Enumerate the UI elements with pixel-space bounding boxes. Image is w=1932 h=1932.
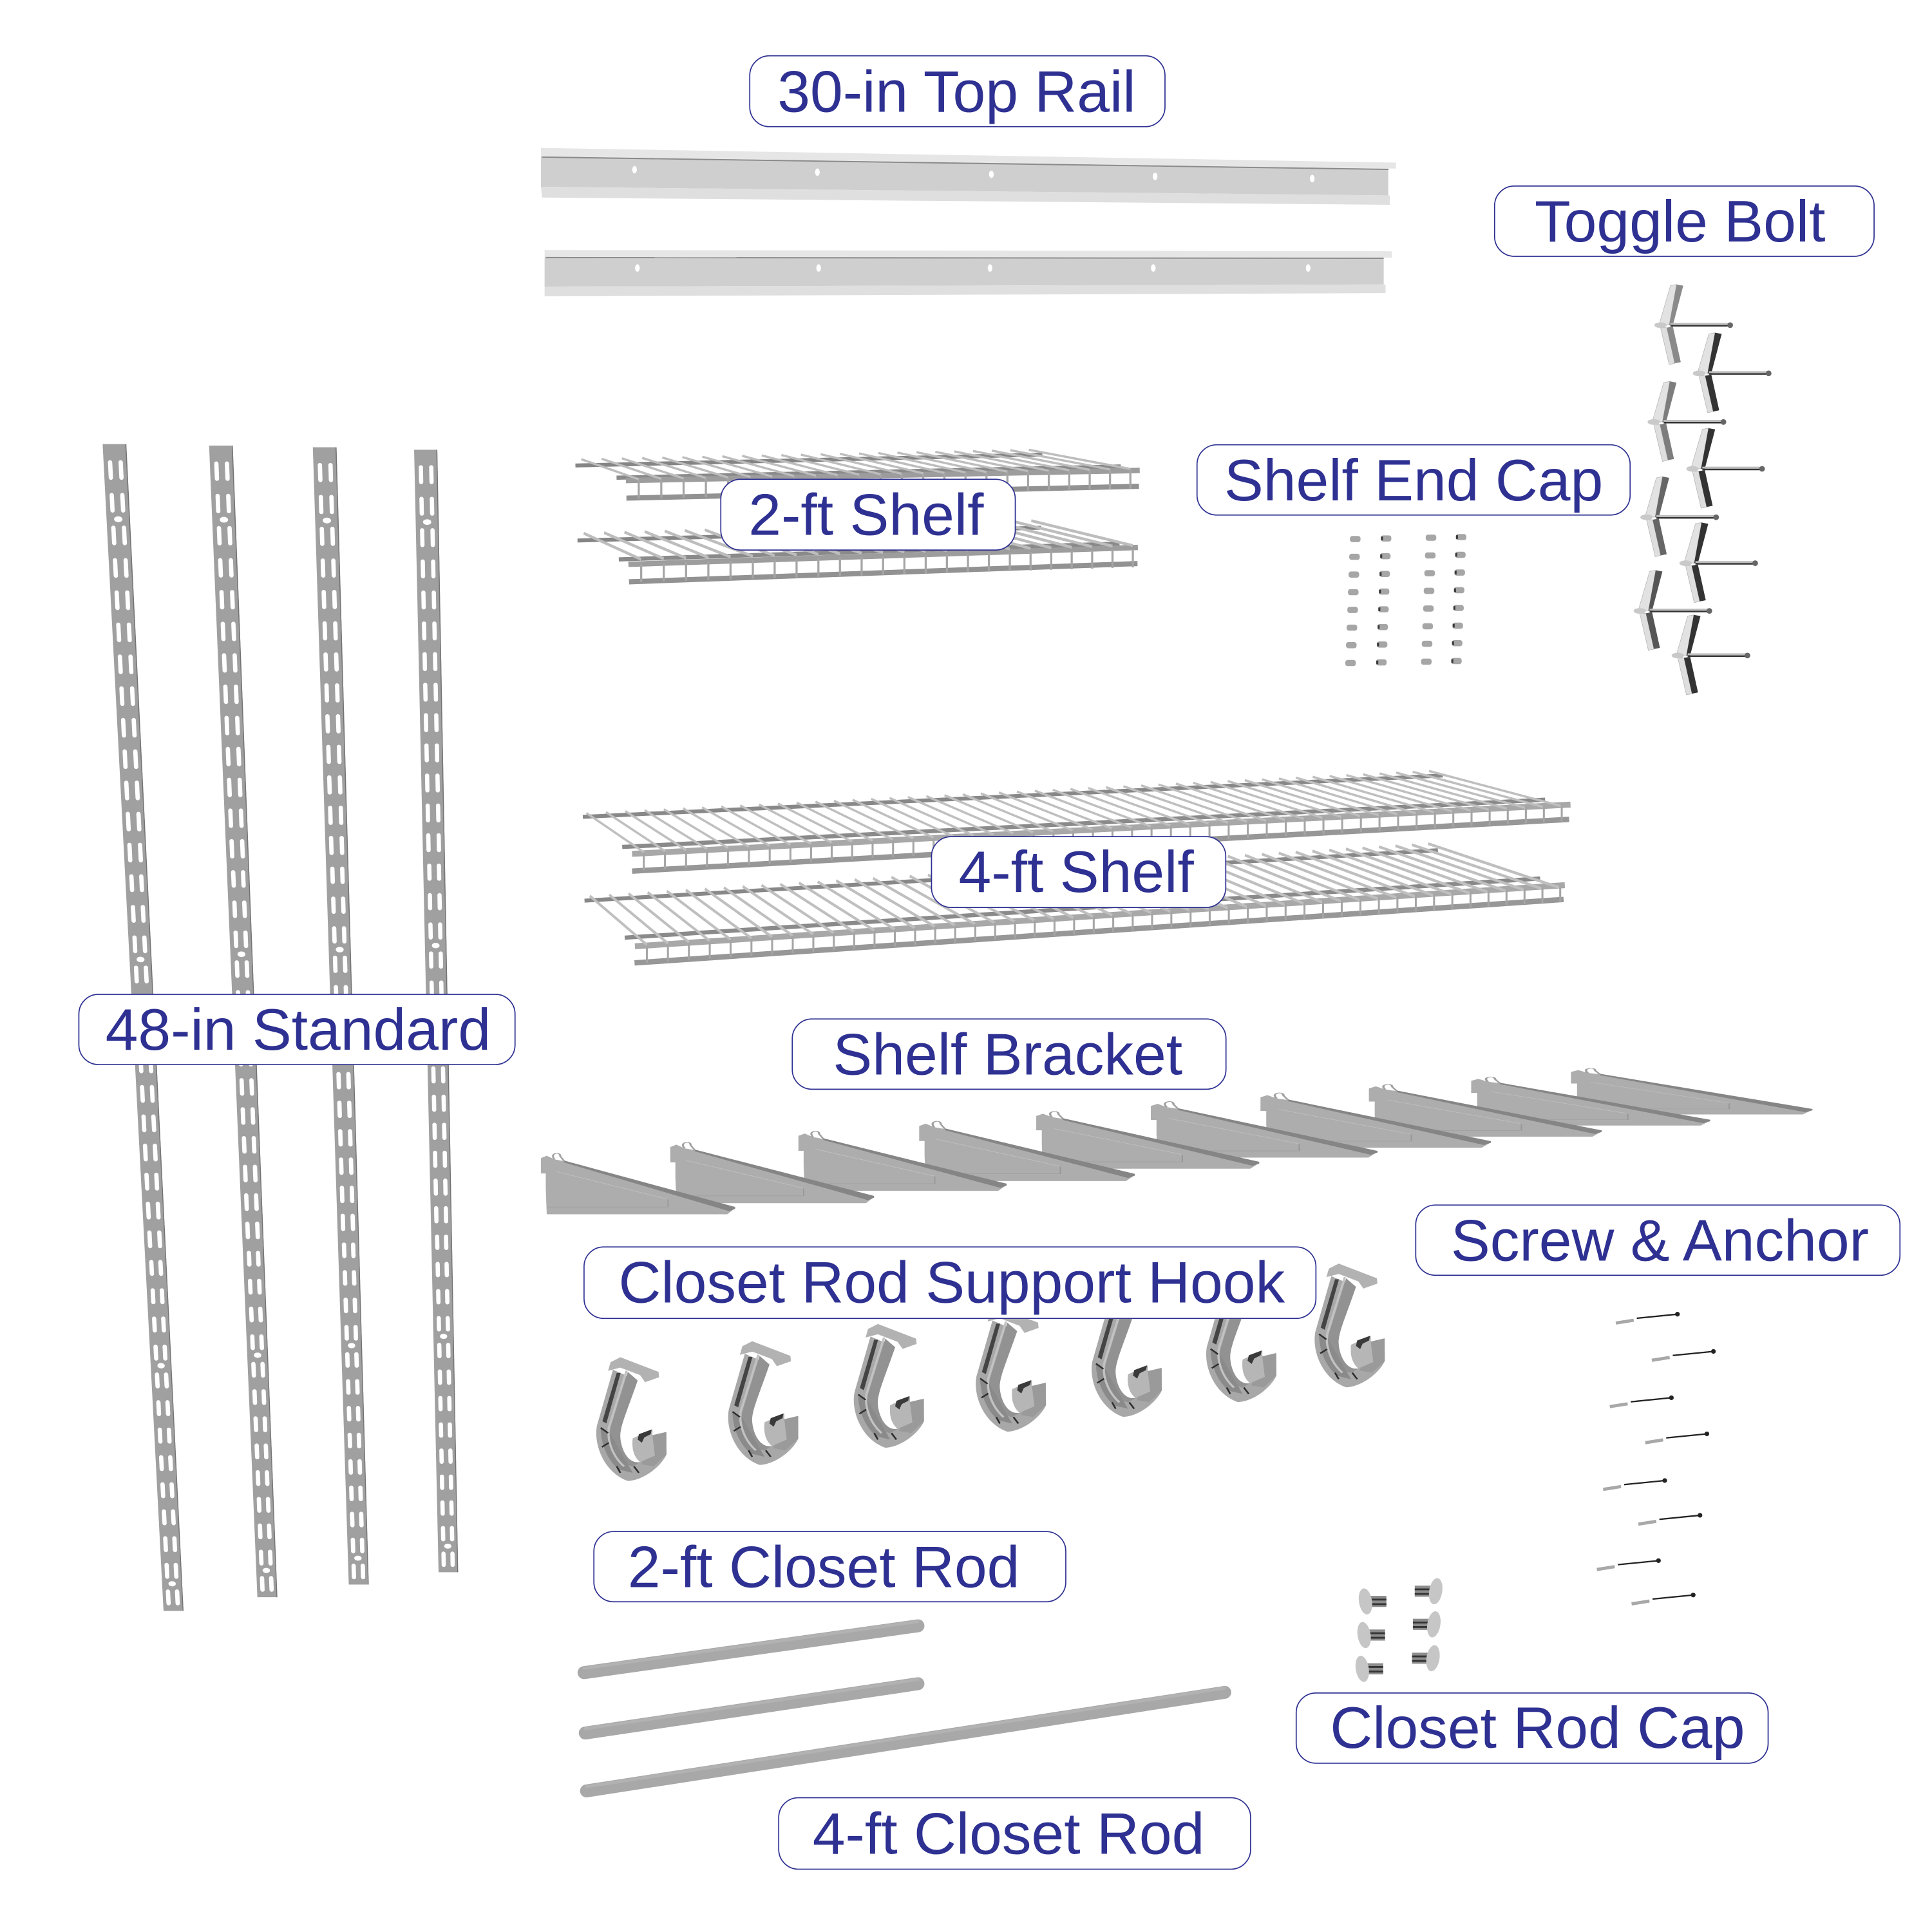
bracket 5 — [1036, 1112, 1259, 1169]
hook 6 — [1206, 1278, 1276, 1402]
panel: screws and anchors — [1597, 1312, 1716, 1604]
bracket 2 — [670, 1142, 874, 1203]
label: 30-in Top Rail: 30-in Top Rail — [777, 59, 1136, 124]
hook 5 — [1092, 1293, 1162, 1417]
2-ft shelf lower — [578, 518, 1138, 582]
panel: toggle bolts — [1634, 285, 1772, 695]
screw 1 — [1616, 1312, 1680, 1323]
hook 2 — [728, 1341, 799, 1465]
screw 8 — [1632, 1593, 1696, 1604]
4-ft shelf upper — [583, 764, 1571, 871]
label: Shelf Bracket: Shelf Bracket — [833, 1021, 1182, 1087]
bracket 8 — [1369, 1084, 1602, 1137]
toggle bolt 8 — [1672, 615, 1750, 695]
standard 2 — [209, 446, 279, 1597]
toggle bolt 7 — [1634, 570, 1712, 650]
rod cap 2 — [1356, 1621, 1385, 1649]
bracket 9 — [1471, 1077, 1710, 1126]
bracket 1 — [541, 1153, 735, 1215]
rod cap 4 — [1415, 1577, 1444, 1605]
panel: 4-ft shelves — [583, 764, 1571, 963]
label: Shelf End Cap: Shelf End Cap — [1224, 448, 1603, 513]
label: 4-ft Shelf: 4-ft Shelf — [959, 839, 1194, 905]
standard 3 — [313, 448, 370, 1585]
top rail 2 — [545, 250, 1392, 296]
toggle bolt 4 — [1686, 428, 1765, 508]
bracket 6 — [1151, 1101, 1378, 1158]
rod cap 6 — [1412, 1644, 1441, 1672]
end caps column 2 — [1376, 535, 1391, 665]
label: Screw & Anchor: Screw & Anchor — [1451, 1208, 1869, 1273]
toggle bolt 2 — [1693, 333, 1772, 413]
panel: closet rod caps — [1354, 1577, 1444, 1683]
panel: closet rod support hooks — [596, 1264, 1385, 1481]
panel: shelf end caps — [1345, 534, 1466, 666]
label: 2-ft Closet Rod: 2-ft Closet Rod — [628, 1534, 1019, 1600]
toggle bolt 3 — [1647, 381, 1726, 462]
top rail 1 — [541, 148, 1396, 205]
end caps column 1 — [1345, 536, 1361, 666]
label: Closet Rod Cap: Closet Rod Cap — [1330, 1695, 1745, 1761]
toggle bolt 5 — [1640, 477, 1719, 556]
4-ft closet rod — [587, 1688, 1225, 1791]
rod cap 3 — [1354, 1655, 1383, 1683]
hook 7 — [1314, 1264, 1385, 1387]
2-ft closet rod 2 — [585, 1680, 918, 1733]
bracket 7 — [1260, 1093, 1491, 1148]
label: 48-in Standard: 48-in Standard — [106, 997, 491, 1063]
standard 1 — [102, 444, 185, 1611]
hook 1 — [596, 1358, 667, 1481]
standard 4 — [414, 450, 460, 1572]
screw 6 — [1638, 1513, 1702, 1524]
hook 3 — [854, 1324, 924, 1448]
screw 7 — [1597, 1558, 1661, 1569]
label: Toggle Bolt: Toggle Bolt — [1535, 189, 1825, 254]
rod cap 1 — [1357, 1587, 1387, 1615]
bracket 4 — [919, 1121, 1135, 1181]
panel: 2-ft shelves — [575, 448, 1140, 582]
2-ft closet rod 1 — [584, 1622, 918, 1672]
end caps column 3 — [1421, 535, 1436, 665]
rod cap 5 — [1413, 1610, 1443, 1638]
2-ft shelf upper — [575, 448, 1140, 498]
screw 4 — [1645, 1432, 1709, 1443]
4-ft shelf lower — [585, 835, 1565, 963]
screw 2 — [1652, 1349, 1716, 1360]
label: 4-ft Closet Rod: 4-ft Closet Rod — [813, 1801, 1204, 1867]
toggle bolt 6 — [1680, 522, 1758, 603]
end caps column 4 — [1451, 534, 1466, 664]
panel: 48-in standards — [102, 444, 460, 1611]
panel: shelf brackets — [541, 1068, 1812, 1215]
screw 3 — [1610, 1396, 1674, 1406]
toggle bolt 1 — [1654, 285, 1733, 365]
panel: 30-in top rails — [541, 148, 1396, 296]
hook 4 — [976, 1308, 1046, 1432]
screw 5 — [1603, 1478, 1667, 1490]
panel: closet rods — [584, 1622, 1225, 1791]
bracket 3 — [799, 1131, 1007, 1191]
label: Closet Rod Support Hook: Closet Rod Support Hook — [618, 1249, 1285, 1315]
label: 2-ft Shelf: 2-ft Shelf — [748, 482, 984, 548]
bracket 10 — [1571, 1068, 1812, 1115]
